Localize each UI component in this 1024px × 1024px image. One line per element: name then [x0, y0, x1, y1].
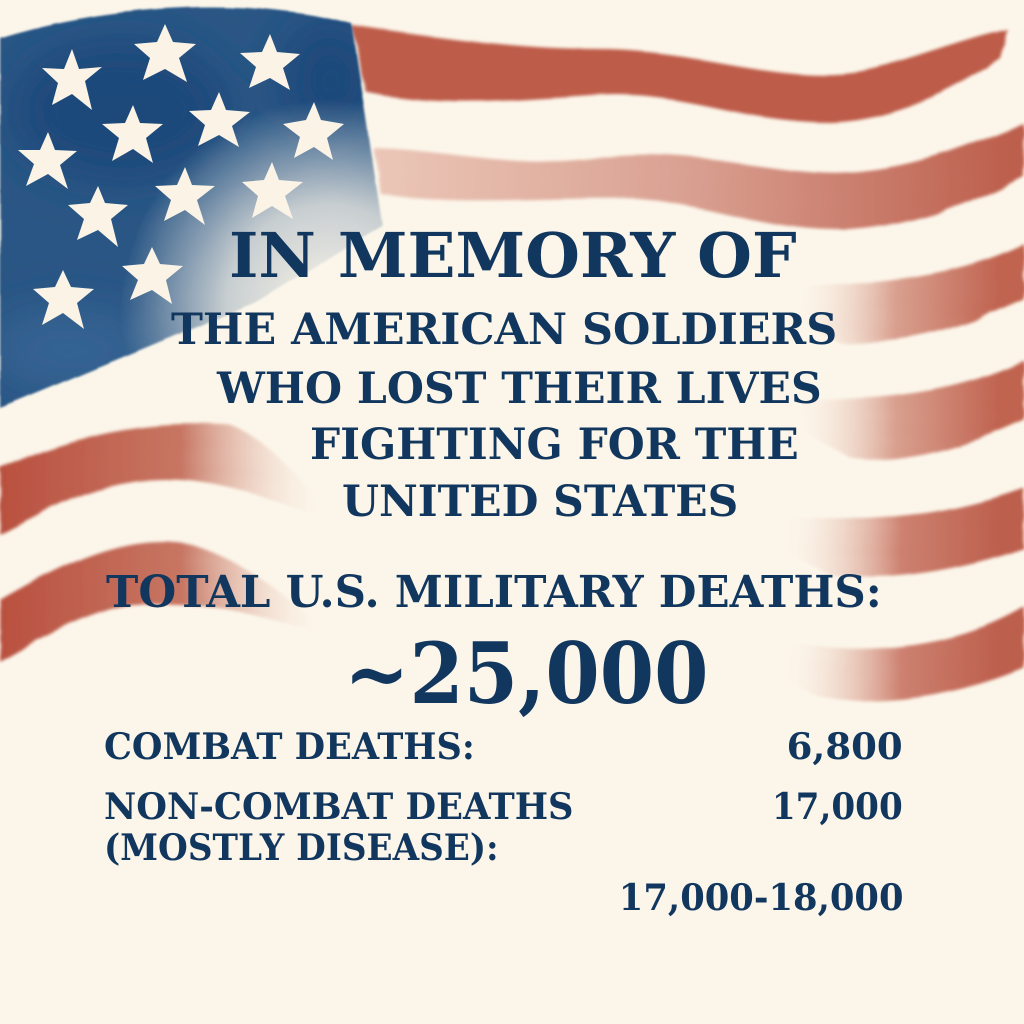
title: IN MEMORY OF [229, 219, 797, 292]
non-combat deaths row: (MOSTLY DISEASE): [104, 827, 499, 869]
canton [0, 5, 384, 410]
total number: ~25,000 [344, 624, 708, 723]
illustration: watercolor American flag [0, 5, 1024, 704]
subtitle: WHO LOST THEIR LIVES [217, 364, 822, 414]
subtitle [171, 305, 837, 527]
subtitle: THE AMERICAN SOLDIERS [171, 305, 837, 355]
stripes [0, 26, 1024, 701]
non-combat deaths row [104, 786, 903, 869]
stars [18, 24, 344, 329]
non-combat deaths row: NON-COMBAT DEATHS [104, 786, 574, 828]
combat deaths row: COMBAT DEATHS: [104, 726, 475, 768]
subtitle: FIGHTING FOR THE [310, 420, 799, 470]
combat deaths row [104, 726, 903, 768]
non-combat deaths row: 17,000 [772, 786, 903, 828]
range value: 17,000-18,000 [618, 877, 903, 919]
total label: TOTAL U.S. MILITARY DEATHS: [106, 567, 882, 618]
combat deaths row: 6,800 [787, 726, 903, 768]
subtitle: UNITED STATES [342, 477, 738, 527]
